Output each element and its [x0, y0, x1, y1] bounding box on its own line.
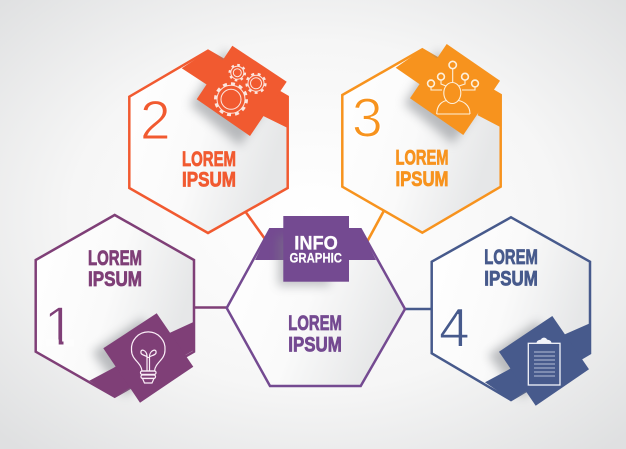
- step 2 label: LOREM: [182, 148, 236, 171]
- step 4 icon tile: [499, 316, 589, 406]
- connector: step 1 to center: [194, 306, 228, 309]
- step 2 number: 2: [140, 89, 171, 151]
- step 1 colour band: [89, 322, 194, 397]
- icon: gears: [216, 65, 266, 115]
- connector: step 3 to center: [368, 212, 384, 241]
- step 2 colour band: [182, 51, 288, 128]
- connector: step 2 to center: [246, 212, 265, 239]
- step 4 label: LOREM: [484, 246, 538, 269]
- center label: LOREM: [288, 312, 342, 335]
- step 4 colour band: [485, 323, 590, 400]
- center title tile: [283, 216, 349, 282]
- step 3 label: LOREM: [396, 147, 448, 170]
- panel: step 2: [129, 46, 288, 233]
- icon: person network: [428, 61, 478, 114]
- panel: step 1: [36, 215, 194, 403]
- step 4 number: 4: [439, 297, 470, 359]
- center title tile: INFO: [294, 234, 338, 254]
- step 1 number: 1: [44, 295, 75, 357]
- step 3 label: [396, 147, 448, 191]
- panel: center hexagon: [227, 216, 405, 386]
- connector: step 4 to center: [404, 308, 432, 310]
- step 4 label: IPSUM: [484, 268, 538, 291]
- step 3 number: 3: [352, 87, 383, 149]
- icon: clipboard: [528, 338, 560, 385]
- step 2 tile shadow: [190, 50, 270, 146]
- center label: IPSUM: [288, 334, 342, 357]
- step 3 icon tile: [410, 44, 500, 135]
- center title tile: GRAPHIC: [290, 250, 342, 265]
- step 3 label: IPSUM: [396, 168, 448, 191]
- step 1 tile shadow: [92, 318, 166, 396]
- center colour band: [255, 229, 376, 260]
- panel: step 3: [342, 44, 501, 233]
- step 1 label: LOREM: [88, 247, 142, 270]
- step 2 label: IPSUM: [182, 169, 236, 192]
- center tile shadow: [278, 236, 330, 286]
- step 1 label: IPSUM: [88, 268, 142, 291]
- step 1 label: [88, 247, 142, 291]
- step 1 icon tile: [103, 313, 193, 403]
- step 4 label: [484, 246, 538, 291]
- step 3 colour band: [396, 49, 501, 127]
- panel: step 4: [432, 217, 590, 406]
- step 4 tile shadow: [488, 321, 562, 398]
- center label: [288, 312, 342, 357]
- step 2 label: [182, 148, 236, 192]
- step 3 tile shadow: [404, 50, 483, 144]
- icon: light bulb: [131, 332, 165, 383]
- step 2 icon tile: [197, 46, 287, 136]
